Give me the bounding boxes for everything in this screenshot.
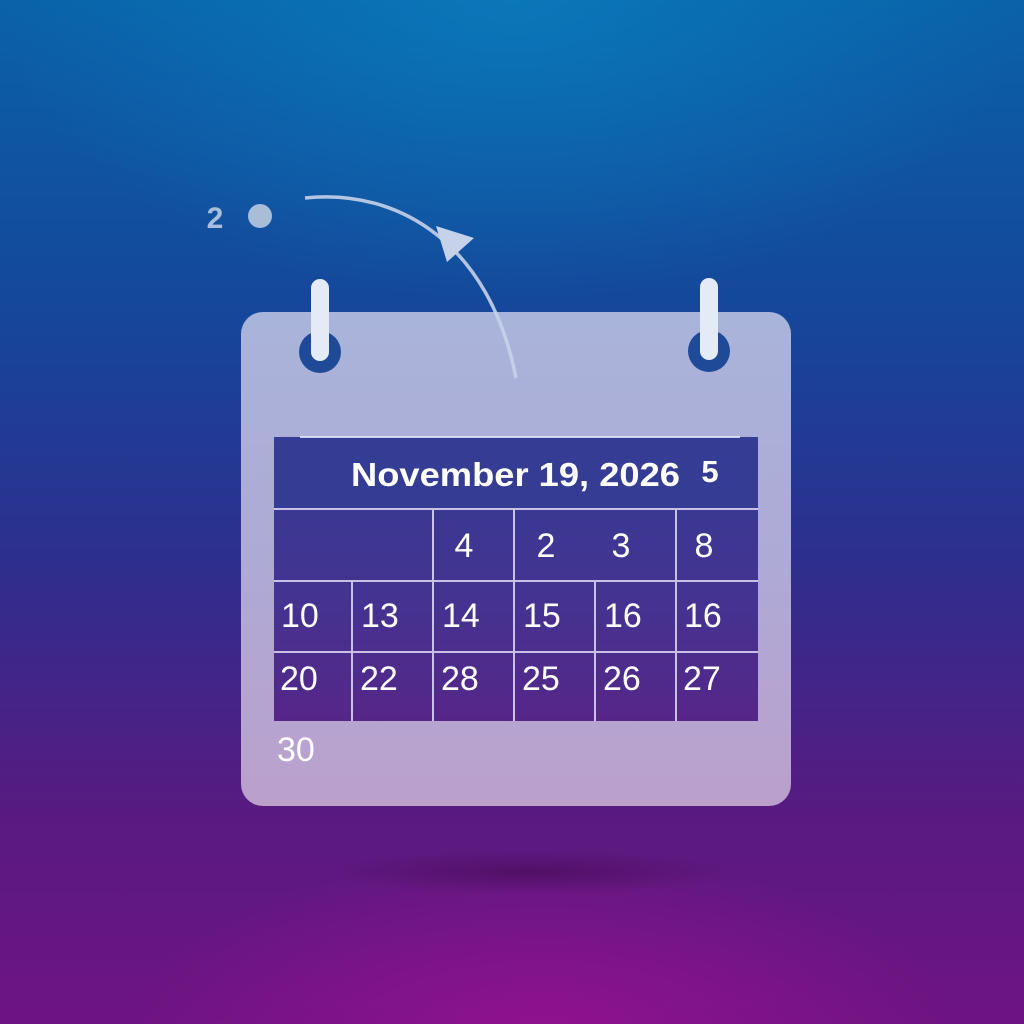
label: number 2 with dot: 2 (207, 202, 223, 235)
calendar grid: 5 (701, 454, 719, 489)
day numbers: 27 (683, 660, 721, 698)
icon: binder rings (299, 278, 730, 373)
day numbers: 14 (442, 597, 480, 635)
day numbers: 25 (522, 660, 560, 698)
day numbers: 15 (523, 597, 561, 635)
day numbers: 4 (455, 527, 473, 565)
day numbers: 10 (281, 597, 319, 635)
day numbers: 16 (604, 597, 642, 635)
calendar card (241, 278, 791, 806)
label: number 2 with dot (207, 202, 272, 235)
day numbers: 20 (280, 660, 318, 698)
day numbers: 2 (537, 527, 555, 565)
calendar grid (274, 437, 758, 769)
day numbers (277, 527, 722, 769)
day numbers: 13 (361, 597, 399, 635)
day numbers: 22 (360, 660, 398, 698)
day numbers: 3 (612, 527, 630, 565)
day numbers: 28 (441, 660, 479, 698)
day numbers: 16 (684, 597, 722, 635)
header: date: November 19, 2026 (351, 456, 680, 493)
day numbers: 8 (695, 527, 713, 565)
day numbers: 26 (603, 660, 641, 698)
arrow: curved arrow into calendar (305, 197, 516, 378)
day numbers: 30 (277, 731, 315, 769)
